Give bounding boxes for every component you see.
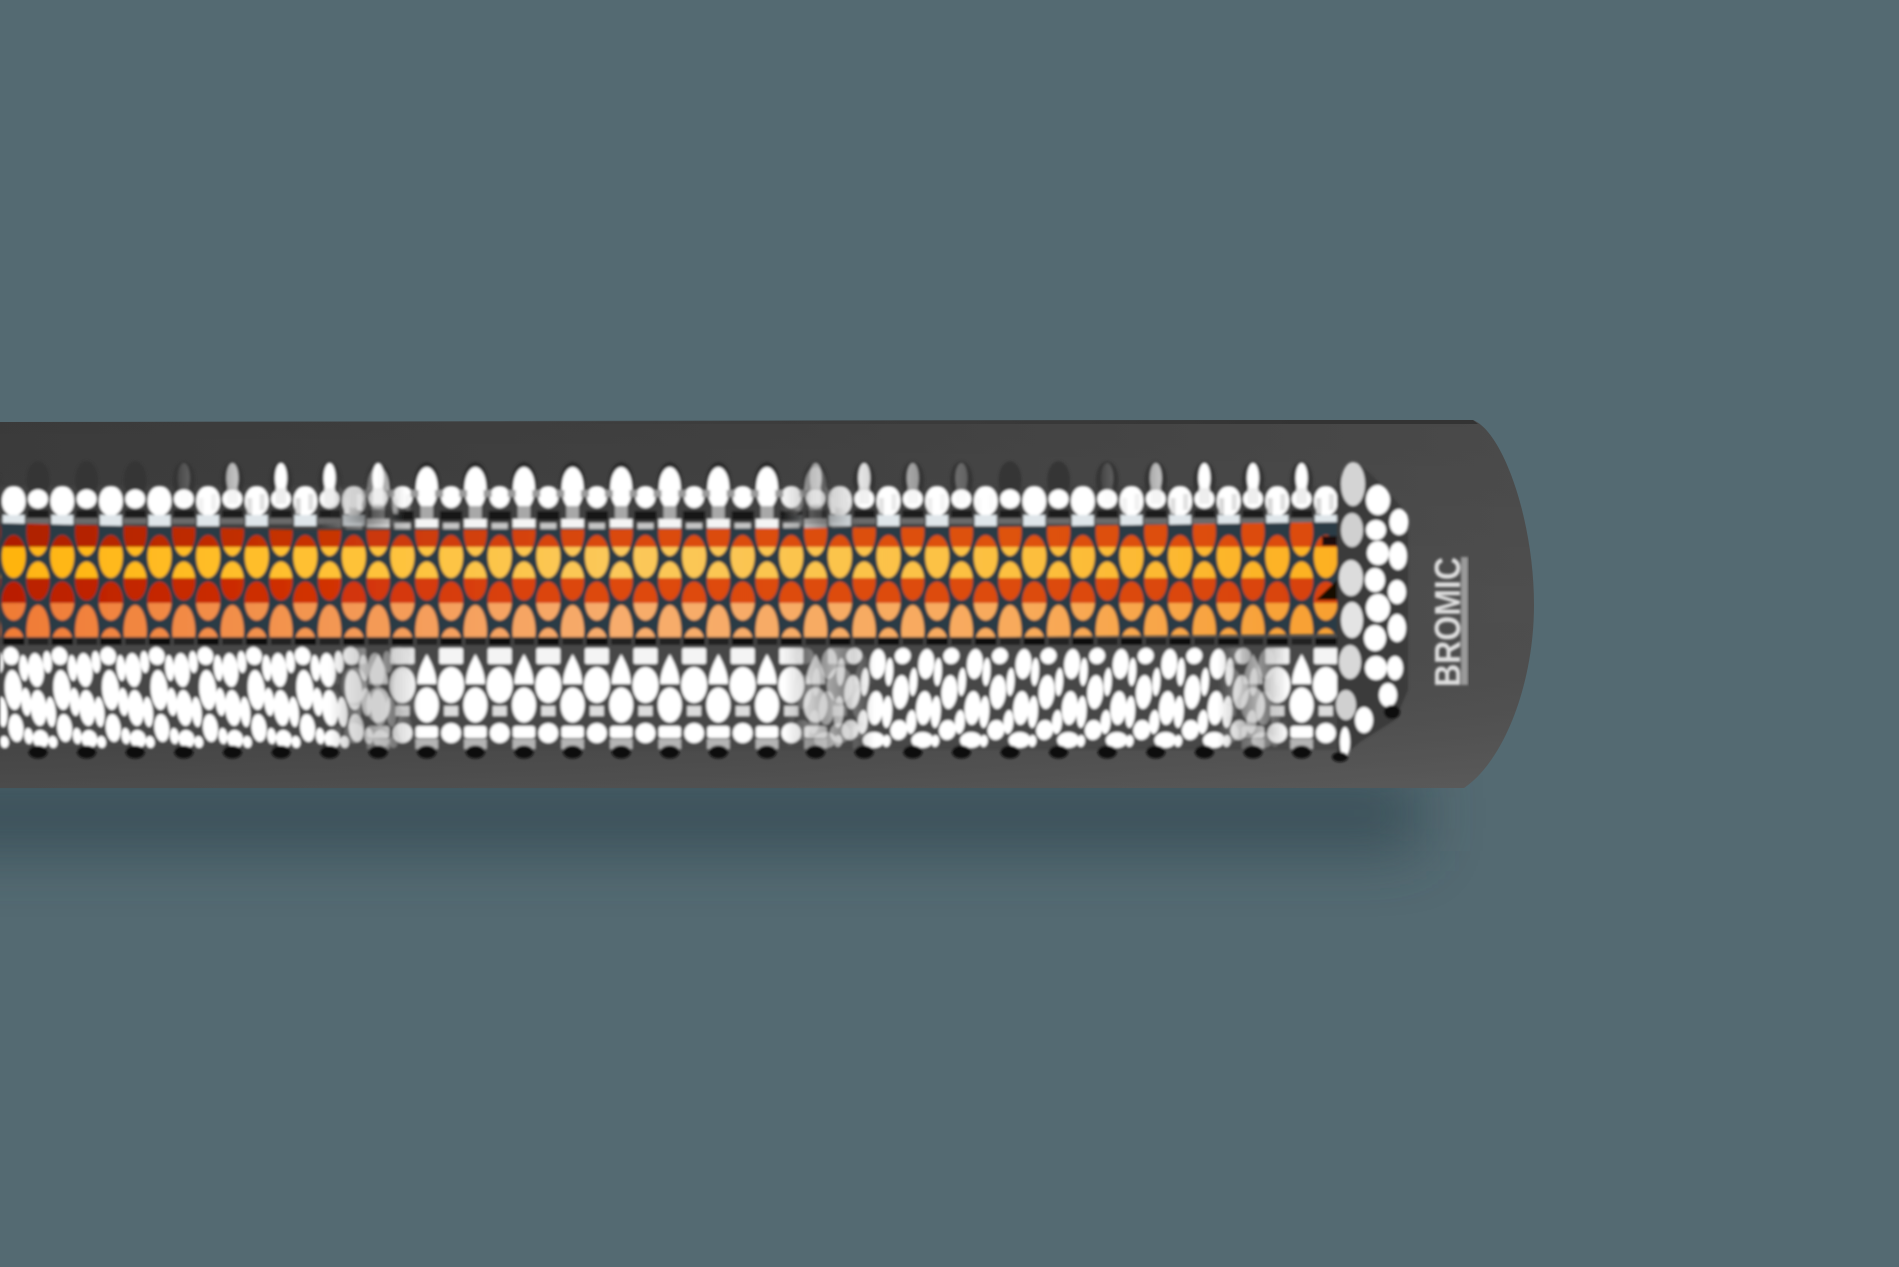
grille end cluster <box>1332 462 1408 762</box>
heater body <box>0 420 1534 788</box>
heater unit <box>0 420 1534 788</box>
perforated grille <box>0 440 1408 762</box>
brand logo: BROMIC <box>1427 557 1468 687</box>
dark strip below element <box>0 637 1340 648</box>
infographic canvas <box>0 420 1534 868</box>
heater drop shadow <box>0 775 1420 851</box>
upper grille: white perforations <box>0 461 1340 532</box>
glowing heating element <box>0 515 1340 645</box>
lower grille: white perforations <box>0 646 1340 761</box>
